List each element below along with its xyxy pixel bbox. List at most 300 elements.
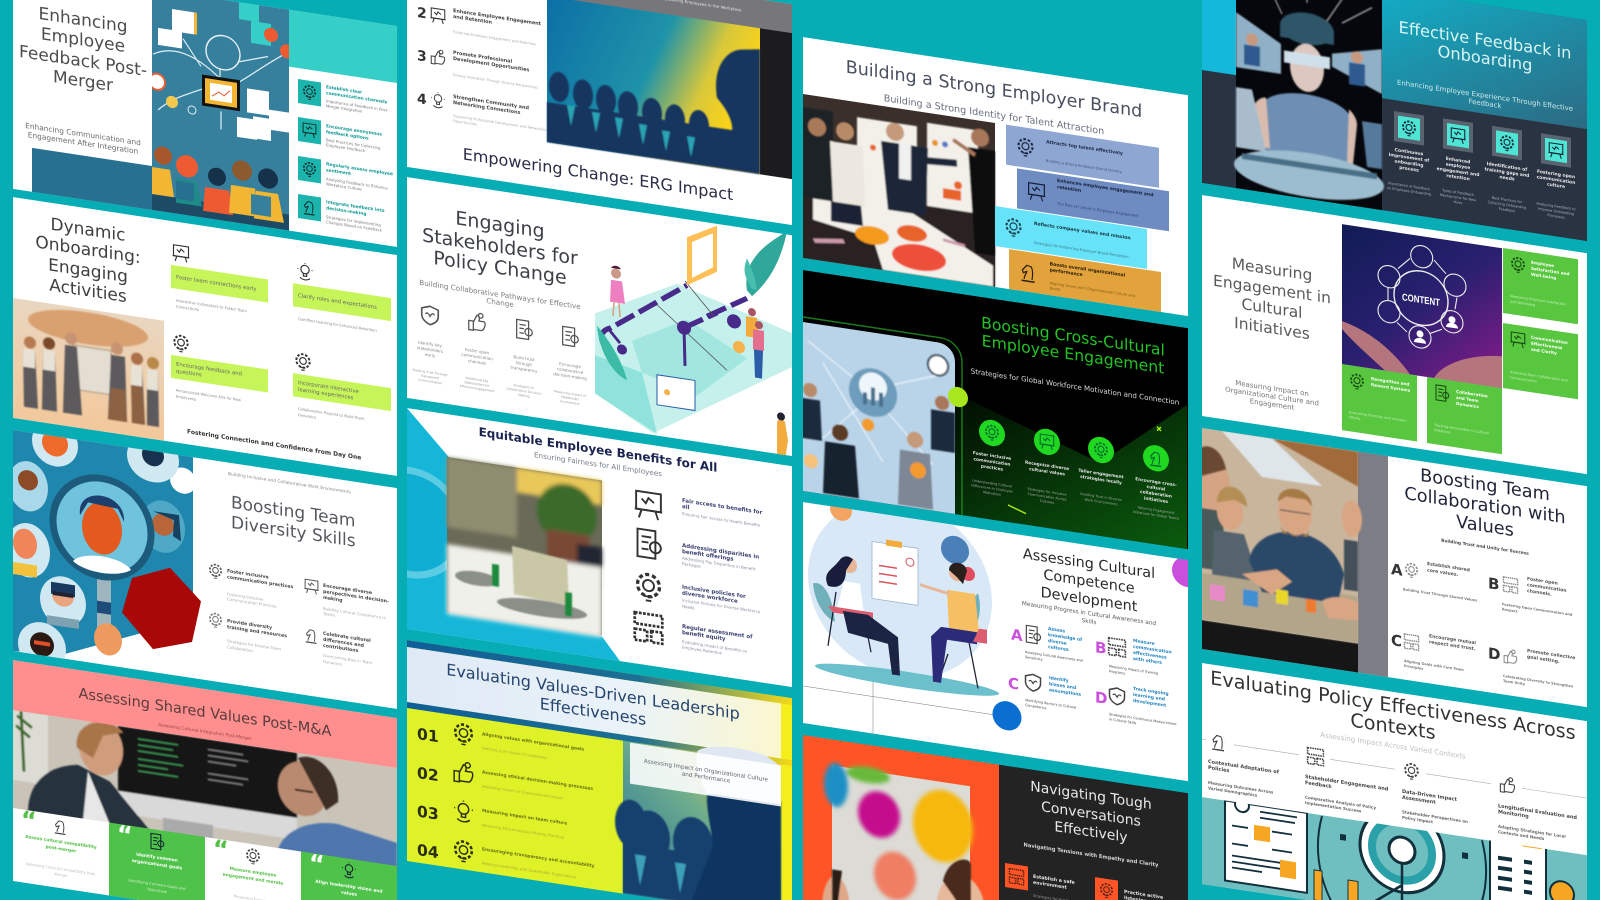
lime panel [407, 702, 623, 894]
item D: Promote collective [1527, 648, 1575, 661]
slide: Dynamic Onboarding [13, 197, 397, 476]
pale hair and band [696, 742, 781, 804]
image: leader silhouette [615, 739, 781, 900]
slide: Building a Strong Employer Brand [803, 37, 1188, 316]
column: Transparent [420, 373, 440, 380]
item 03 [417, 794, 567, 843]
column: Identification of [1487, 161, 1527, 173]
panel: satisfaction: Satisfaction and [1531, 266, 1570, 276]
bar: performance [1009, 249, 1161, 312]
title: Engaging [48, 255, 128, 287]
title: Boosting Team [1420, 465, 1550, 505]
bar: engagement: retention [1057, 184, 1081, 194]
subtitle: Skills [1082, 618, 1096, 626]
step 1: Policies [1208, 765, 1230, 774]
step 2: Feedback [1305, 780, 1332, 790]
item A: A [1391, 560, 1403, 580]
item: Overcoming Bias in Team [323, 653, 372, 665]
item C: Encourage mutual [1429, 633, 1476, 646]
item: anonymous feedback: feedback options [326, 129, 369, 142]
item D: Strategies for Continuous Measurement [1109, 712, 1177, 727]
item: contributions [323, 643, 359, 654]
bar: values [995, 206, 1147, 269]
subtitle: Building Inclusive and Collaborative Work Environments [228, 471, 351, 496]
card: interactive: Dynamics [298, 413, 316, 420]
card: leadership: Align leadership vision and [315, 879, 383, 895]
card: morale [205, 833, 301, 900]
column: employee [1446, 162, 1470, 171]
slide: Assessing Cultural Competence [803, 486, 1202, 784]
slide: Boosting Team Collaboration with Values [1186, 426, 1587, 708]
photo tablet [800, 317, 962, 516]
item A: Building Trust Through Shared Values [1403, 587, 1477, 603]
bar: values: Reflects company values and mission [1034, 221, 1131, 241]
item D: learning and [1133, 692, 1165, 703]
title: Policy Change [433, 246, 567, 289]
green wedge [955, 370, 1187, 550]
item: assess sentiment: sentiment [326, 167, 351, 177]
item D: D [1095, 688, 1107, 708]
title: Dynamic [51, 215, 125, 246]
item D: Celebrating Diversity to Strengthen [1503, 674, 1574, 689]
item: Dynamics [323, 659, 342, 667]
slide: Measuring Engagement in Cultural Initiatives [1202, 195, 1587, 475]
panel: recognition: Efforts [1349, 415, 1360, 421]
item: assess sentiment: Regularly assess employee [326, 161, 393, 177]
step 3: Data-Driven Impact [1402, 789, 1457, 803]
panel: recognition: Evaluating Diversity and Inclusion [1349, 410, 1407, 423]
column: onboarding [1395, 158, 1423, 169]
subtitle: Change [486, 296, 514, 309]
bar: attracts talent [1006, 125, 1159, 188]
panel: communication [1503, 323, 1578, 399]
header gradient [1382, 0, 1587, 129]
subtitle: Building Collaborative Pathways for Effective [419, 278, 581, 311]
panel: collaboration: Dynamics [1456, 401, 1479, 409]
title: Evaluating Policy Effectiveness Across [1210, 666, 1576, 744]
item: Teams [322, 611, 335, 618]
card: team connections: Connections [176, 305, 199, 312]
title: Conversations [1041, 799, 1141, 830]
title: Empowering Change: ERG Impact [463, 144, 733, 204]
step 2 [1305, 747, 1389, 818]
title: Assessing Shared Values Post-M&A [79, 685, 332, 740]
subtitle: Engagement After Integration [28, 130, 138, 156]
title: Engagement in [1213, 272, 1331, 307]
subtitle: Engagement [1250, 396, 1294, 412]
step 1: Measuring Outcomes Across [1208, 780, 1274, 795]
subtitle: Strategies for Global Workforce Motivation and Connection [971, 366, 1179, 407]
item C: Aligning Goals with Core Team [1404, 659, 1464, 672]
item C [1391, 628, 1476, 679]
column: Encourage [559, 361, 581, 369]
slide: Enhancing Employee Feedback Post-Merger [13, 0, 397, 247]
item A [1011, 620, 1083, 668]
title: Merger [53, 67, 114, 96]
illustration: two people with clipboard [808, 487, 999, 702]
title: Onboarding [1438, 42, 1532, 75]
banner [13, 660, 397, 768]
benefit item: Evaluating Impact of Benefits on [682, 639, 748, 654]
white callout: Assessing Impact on Organizational Culture [644, 759, 769, 784]
item D [1095, 680, 1177, 732]
purple arc [1172, 555, 1202, 589]
card: goals [109, 819, 205, 900]
benefit item: Inclusive policies for [682, 585, 746, 600]
panel: communication: Analyzing Team Collaboration and [1510, 370, 1568, 383]
title: Employee Engagement [982, 331, 1164, 378]
subtitle: Navigating Tensions with Empathy and Clarity [1024, 842, 1159, 869]
title: Boosting Team [231, 493, 355, 532]
item B [1095, 632, 1172, 683]
title: Activities [49, 276, 127, 307]
column: Effective Engagement [460, 384, 495, 393]
column: Tailor engagement [1078, 468, 1124, 480]
panel: satisfaction: Well-being [1531, 272, 1556, 280]
item B: B [1095, 638, 1106, 658]
column: Processes [1547, 213, 1565, 220]
column: Making [518, 393, 530, 399]
item D: D [1488, 644, 1500, 664]
column: Encourage cross- [1135, 476, 1177, 488]
item: clear channels: Establish clear [326, 84, 363, 96]
item: decision making: Strategies for Implementing [326, 214, 381, 228]
title: Boosting Cross-Cultural [981, 313, 1165, 360]
panel: collaboration: Tracking Participation in Cultural [1433, 423, 1489, 435]
item D [1488, 642, 1575, 694]
step 1: Contextual Adaptation of [1208, 759, 1280, 776]
card: morale: “ [213, 834, 229, 865]
item: Fostering Inclusive [227, 591, 264, 602]
title: Competence [1043, 567, 1135, 597]
card: compatibility [13, 804, 109, 895]
card: roles: Gamified Learning for Enhanced Retention [298, 317, 377, 333]
panel: collaboration [1427, 377, 1502, 454]
photo: two men at computer [13, 708, 397, 873]
photo: speech bubbles [822, 760, 985, 900]
list item 4: Opportunities [453, 119, 477, 127]
item A: core values. [1427, 567, 1459, 578]
step 2: Implementation Success [1305, 800, 1362, 814]
column: Measuring Impact of [554, 389, 587, 398]
illustration: isometric policy path [595, 202, 792, 461]
benefit item: Fair access to benefits for [682, 498, 763, 516]
column: on Employee Onboarding [1387, 186, 1431, 197]
column: Analyzing Feedback to [1536, 202, 1576, 211]
card: compatibility: post-merger [46, 844, 77, 855]
title: Contexts [1350, 709, 1436, 744]
column: Improve Onboarding [1538, 207, 1574, 216]
column: Collecting Onboarding [1488, 200, 1526, 210]
list item 3 [417, 45, 538, 90]
column: Foster open [465, 347, 489, 355]
column: Types of Feedback [1441, 188, 1475, 197]
item: Celebrate cultural [323, 631, 371, 644]
grey strip [1358, 452, 1388, 678]
item: clear channels: communication channels [326, 90, 388, 106]
column: cultural values [1029, 466, 1065, 478]
panel: communication: Effectiveness [1531, 341, 1563, 350]
item: anonymous feedback [298, 117, 382, 156]
item 01: 01 [417, 724, 439, 746]
card: compatibility: Merger [54, 872, 68, 878]
column: Best Practices for [1492, 196, 1523, 204]
column: channels [468, 358, 486, 366]
image: crowd silhouette [547, 0, 792, 179]
slide: Boosting Cross-Cultural Engagement [800, 270, 1188, 550]
item B: Programs [1109, 669, 1125, 676]
item C [1008, 669, 1081, 716]
item: active listening [1095, 877, 1163, 900]
decorative red hexagon [122, 568, 201, 650]
column: Initiatives for Global Teams [1133, 510, 1179, 521]
item: Provide diversity [227, 618, 272, 631]
white callout [630, 743, 781, 806]
column: Collaborative Decision- [506, 386, 542, 396]
timeline lines [1202, 739, 1587, 798]
step 3: Stakeholder Perspectives on [1402, 809, 1468, 824]
dark panel [999, 765, 1188, 900]
item: differences and [323, 637, 364, 649]
item B: effectiveness [1133, 650, 1167, 661]
benefit item: Packages [682, 561, 701, 569]
item: Building Cultural Competence in [323, 606, 386, 620]
item C: Identify [1049, 675, 1069, 684]
item 04: 04 [417, 840, 439, 862]
column: Strategies for Inclusive [1028, 487, 1066, 497]
benefit item [638, 573, 761, 620]
title: Effectiveness [540, 694, 646, 729]
slide: Equitable Employee Benefits [358, 401, 792, 687]
column: cultural [1147, 484, 1166, 493]
item A: Establish shared [1427, 561, 1470, 573]
benefit item: Ensuring Fair Access to Health Benefits [682, 511, 760, 528]
benefit item: benefit equity [682, 630, 726, 643]
column: Improvement of [1389, 152, 1429, 164]
column: Foster inclusive [973, 450, 1011, 462]
subtitle: Feedback [1469, 97, 1501, 110]
list item 4: 4 [417, 91, 427, 108]
column: Building Trust in Diverse [1080, 492, 1122, 502]
item 03: Measuring impact on team culture [482, 808, 567, 827]
item: decision making [298, 194, 385, 233]
item 01 [417, 718, 584, 768]
column [413, 304, 447, 386]
subtitle: Enhancing Employee Experience Through Effective [1397, 78, 1573, 113]
card: leadership [301, 848, 397, 900]
item: Communication Practices [227, 596, 276, 609]
item 01: Defining Core Values in Leadership [482, 746, 547, 760]
card: feedback: Personalized Welcome Kits for New [176, 389, 241, 402]
title: Values [1456, 511, 1514, 541]
subtitle: Assessing Impact Across Varied Contexts [1320, 730, 1466, 761]
step 3: Assessment [1402, 795, 1436, 806]
card: interactive: Collaborative Projects to Build Team [298, 407, 365, 421]
list item 4: Supporting Professional Development and Networking [453, 114, 547, 132]
column: Enhanced [1446, 156, 1470, 166]
item A: cultures [1048, 644, 1069, 653]
list item 2: 2 [417, 5, 427, 22]
column [1133, 442, 1179, 521]
list item 4: Strengthen Community and [453, 94, 529, 111]
panel: teal header [289, 10, 397, 83]
title: Stakeholders for [422, 223, 578, 270]
card: interactive: Incorporate interactive [298, 380, 359, 395]
bar: performance: performance [1050, 267, 1083, 278]
title: Measuring [1232, 255, 1312, 285]
item B: communication [1527, 582, 1567, 594]
panel: recognition: Recognition and [1371, 376, 1409, 387]
column: process [1399, 165, 1419, 174]
title: Effectively [1054, 819, 1128, 846]
bar: attracts talent: Building a Strong Employer Brand Identity [1046, 159, 1123, 174]
list item 4: Networking Connections [453, 100, 520, 116]
item: training and resources [227, 624, 287, 639]
item A: diverse [1048, 638, 1067, 647]
image label: CONTENT [1402, 292, 1441, 309]
left strip [1202, 0, 1236, 75]
item B [1488, 570, 1573, 622]
benefit item [638, 529, 759, 578]
illustration: network and audience [149, 0, 294, 231]
item B: Foster open [1527, 576, 1558, 587]
subtitle: Organizational Culture and [1225, 385, 1319, 408]
item: Encourage diverse [323, 583, 372, 596]
item B: with others [1133, 656, 1162, 666]
benefit item: all [682, 504, 690, 511]
item C: Principles [1404, 664, 1423, 671]
list item 3: Development Opportunities [453, 56, 529, 73]
item 02: Assessing Impact on Organizational Culture [482, 784, 563, 801]
bar: engagement [1017, 168, 1169, 231]
item C: biases and [1049, 681, 1076, 691]
column [1078, 434, 1124, 507]
step 2: Comparative Analysis of Policy [1305, 795, 1376, 810]
photo: team with blocks [1186, 426, 1362, 674]
column: Building Trust Through [413, 368, 447, 377]
slide: Evaluating Values-Driven Leadership [407, 640, 792, 900]
header band [407, 640, 792, 766]
column: collaboration [1140, 489, 1172, 500]
card: leadership: “ [309, 849, 325, 879]
panel: communication: Communication [1510, 376, 1537, 384]
column: Mechanisms for New [1440, 193, 1476, 202]
step 2: Stakeholder Engagement and [1305, 774, 1389, 793]
column: through [516, 360, 532, 367]
blue circle [992, 699, 1022, 732]
column: culture [1547, 182, 1565, 190]
column: Understanding Cultural [972, 479, 1012, 489]
step 4: Longitudinal Evaluation and [1498, 803, 1577, 821]
column: decision-making [553, 371, 587, 381]
column [460, 310, 495, 393]
item 02: Assessing ethical decision-making processes [482, 769, 593, 792]
slide: Boosting Team Diversity Skills [13, 430, 397, 709]
white callout: and Performance [682, 772, 731, 785]
panel: recognition: Reward Systems [1371, 382, 1411, 393]
title: Onboarding: [35, 232, 141, 268]
item A: A [1011, 625, 1023, 645]
image: content cycle [1342, 224, 1502, 388]
panel: communication: Communication [1531, 335, 1568, 345]
subtitle: Measuring Progress in Cultural Awareness and [1022, 601, 1156, 627]
item 04: Encouraging transparency and accountability [482, 846, 595, 869]
slide: Empowering Change ERG Impact [407, 0, 792, 225]
photo: team at whiteboards [803, 94, 995, 287]
item: Strategies for Diverse Team [227, 638, 281, 651]
subtitle: Building Trust and Unity for Success [1441, 538, 1529, 557]
audience [152, 145, 289, 231]
step 1: Varied Demographics [1208, 785, 1258, 798]
item C: C [1008, 674, 1019, 694]
column: Work Environments [1084, 498, 1118, 507]
item: perspectives in decision- [323, 589, 389, 605]
decorative ring [358, 463, 462, 582]
panel: satisfaction: Employee [1531, 260, 1554, 268]
card: feedback: questions [176, 369, 202, 379]
slide: Engaging Stakeholders [407, 174, 792, 461]
illustration: people and magnifier [13, 430, 193, 659]
column: practices [981, 463, 1003, 473]
list item 3: Promote Professional [453, 50, 512, 65]
item A: Assess [1048, 626, 1066, 635]
column: Stakeholder [561, 395, 580, 402]
item 02 [417, 755, 593, 809]
lime marks [1008, 404, 1161, 534]
column: Differences in Employee [971, 483, 1013, 494]
column: Importance of Feedback [1388, 181, 1431, 192]
item D: Track ongoing [1133, 686, 1169, 697]
item: decision making: decision-making [326, 205, 366, 217]
item: anonymous feedback: Employee Feedback [326, 142, 366, 153]
card: feedback: Employees [176, 395, 196, 402]
list item 2: Enhance Employee Engagement [453, 8, 542, 27]
column [1387, 110, 1431, 197]
title: Building a Strong Employer Brand [846, 58, 1142, 122]
item [210, 564, 293, 611]
title: Equitable Employee Benefits for All [479, 425, 717, 475]
card: goals: Identify common [136, 852, 178, 864]
item 03: 03 [417, 802, 439, 824]
slide: Assessing Shared Values [13, 660, 397, 900]
column: Motivation [983, 490, 1001, 497]
item C: Identifying Barriers to Cultural [1025, 698, 1076, 710]
column: Identifying Key [465, 376, 489, 383]
step 4: Adapting Strategies for Local [1498, 824, 1566, 839]
column: communication [461, 352, 493, 362]
column [1437, 117, 1479, 208]
column: Build trust [513, 354, 535, 362]
column: Communication Across [1028, 492, 1067, 502]
card: compatibility: Assess cultural compatibility [25, 834, 97, 851]
item C: respect and trust. [1429, 639, 1476, 652]
column [1485, 125, 1529, 215]
title: Assessing Cultural [1023, 546, 1155, 582]
column: collaborative [557, 366, 584, 375]
item: Collaboration [227, 644, 253, 653]
panel: collaboration: Collaboration [1456, 389, 1488, 399]
item D: development [1133, 698, 1167, 709]
white content panel [1202, 663, 1587, 855]
title: Feedback Post- [19, 42, 147, 81]
step 4: Contexts and Needs [1498, 829, 1545, 841]
column [1536, 132, 1576, 221]
item: assess sentiment [298, 156, 393, 190]
item C: assumptions [1049, 687, 1081, 698]
column: needs [1499, 174, 1515, 183]
card: roles: Clarify roles and expectations [298, 293, 377, 311]
benefit item: Needs [682, 604, 695, 610]
